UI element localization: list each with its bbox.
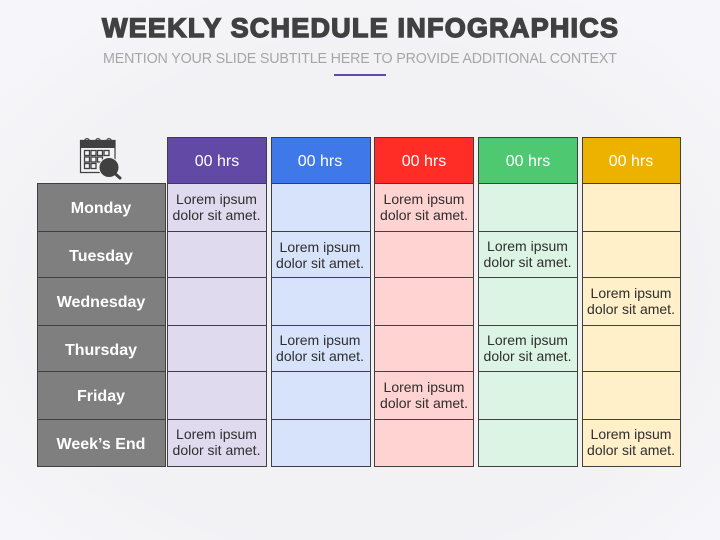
column: green xyxy=(478,138,578,466)
column: purple xyxy=(168,138,266,466)
title underline xyxy=(334,74,386,76)
column header xyxy=(168,138,266,184)
column: yellow: dolor sit amet. xyxy=(587,301,675,317)
column: purple: Lorem ipsum xyxy=(176,191,257,207)
row label: Monday: Monday xyxy=(71,200,131,217)
column: blue xyxy=(272,138,370,466)
column header xyxy=(374,138,474,184)
column: blue: Lorem ipsum xyxy=(280,332,360,348)
column: green: Lorem ipsum xyxy=(487,238,568,254)
row label: Tuesday: Tuesday xyxy=(69,248,133,265)
title: WEEKLY SCHEDULE INFOGRAPHICS xyxy=(102,13,618,43)
column: purple: dolor sit amet. xyxy=(173,207,260,223)
row label: Week's End xyxy=(38,420,166,466)
column header: 00 hrs xyxy=(195,153,239,170)
row label: Week's End: Week’s End xyxy=(57,436,145,453)
column: blue: dolor sit amet. xyxy=(276,348,364,364)
column: red: Lorem ipsum xyxy=(384,379,464,395)
column header: 00 hrs xyxy=(506,153,550,170)
column: red: dolor sit amet. xyxy=(380,207,468,223)
subtitle: MENTION YOUR SLIDE SUBTITLE HERE TO PROVIDE ADDITIONAL CONTEXT xyxy=(103,51,617,67)
column: yellow xyxy=(582,138,680,466)
column header: 00 hrs xyxy=(402,153,446,170)
icon: calendar with magnifier xyxy=(80,139,120,178)
row label: Thursday: Thursday xyxy=(65,342,137,359)
column: green: Lorem ipsum xyxy=(487,332,568,348)
column header: 00 hrs xyxy=(298,153,342,170)
row label: Wednesday xyxy=(38,278,166,326)
column: red xyxy=(374,138,474,466)
column: purple: Lorem ipsum xyxy=(176,426,257,442)
row label: Friday: Friday xyxy=(77,388,125,405)
column header xyxy=(272,138,370,184)
row label: Wednesday: Wednesday xyxy=(57,294,145,311)
column: red: dolor sit amet. xyxy=(380,395,468,411)
column: green: dolor sit amet. xyxy=(484,254,571,270)
column header: 00 hrs xyxy=(609,153,653,170)
column: yellow: Lorem ipsum xyxy=(591,426,671,442)
column: red: Lorem ipsum xyxy=(384,191,464,207)
row label: Friday xyxy=(38,372,166,420)
column: purple: dolor sit amet. xyxy=(173,442,260,458)
column: blue: dolor sit amet. xyxy=(276,255,364,271)
column header xyxy=(582,138,680,184)
column: green: dolor sit amet. xyxy=(484,348,571,364)
column: yellow: dolor sit amet. xyxy=(587,442,675,458)
row label: Tuesday xyxy=(38,232,166,278)
row label: Thursday xyxy=(38,326,166,372)
column: blue: Lorem ipsum xyxy=(280,239,360,255)
column header xyxy=(478,138,578,184)
row labels column xyxy=(38,184,166,466)
row label: Monday xyxy=(38,184,166,232)
column: yellow: Lorem ipsum xyxy=(591,285,671,301)
